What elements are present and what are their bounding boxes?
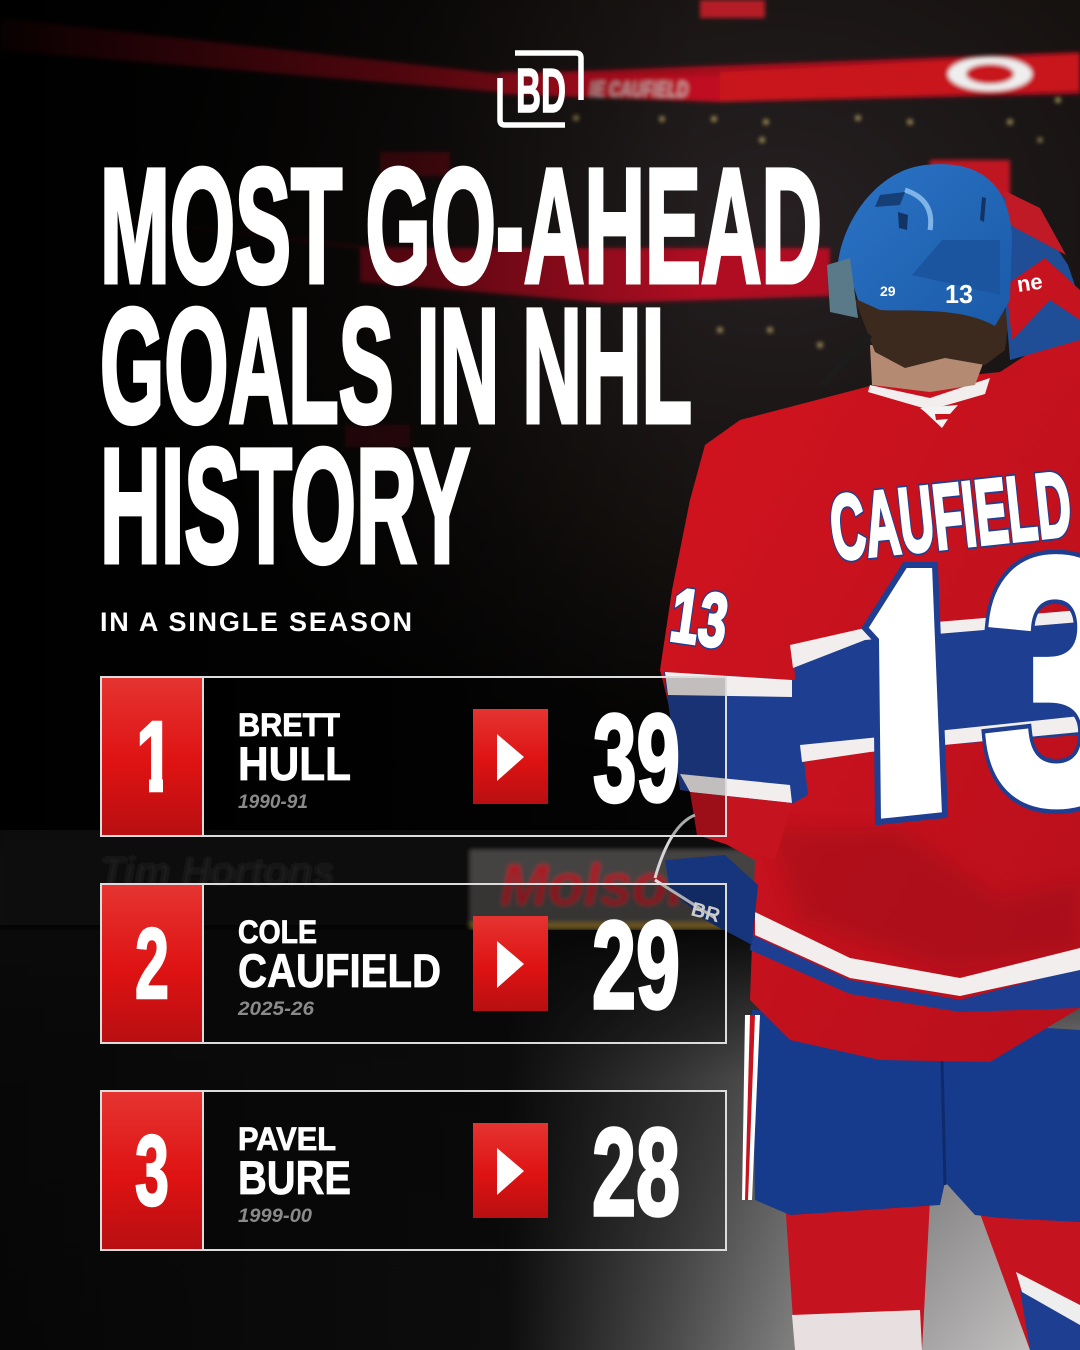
player name — [238, 1121, 351, 1204]
value: 39 — [593, 690, 680, 828]
logo: BD — [500, 53, 581, 126]
rank badge 2 — [102, 885, 202, 1042]
player name: BRETT — [238, 707, 340, 743]
right glove raised — [1000, 190, 1080, 360]
glove — [655, 815, 758, 945]
ice — [0, 930, 1080, 1350]
ribbon board: upper: IE CAUFIELD — [590, 77, 688, 102]
title — [100, 134, 822, 597]
panel: rank 2 — [101, 884, 726, 1043]
sleeve number — [666, 573, 733, 665]
panel: rank 3 — [101, 1091, 726, 1250]
rank badge 2: 2 — [135, 908, 169, 1020]
helmet: 29 — [880, 283, 896, 299]
jersey number 13 — [865, 486, 1080, 877]
collar and logo — [868, 378, 990, 428]
glove: BR — [689, 899, 723, 927]
player name: HULL — [238, 737, 351, 790]
logo: BD: BD — [516, 57, 566, 126]
jersey hem stripes — [750, 912, 1080, 1012]
value: 29 — [592, 897, 680, 1035]
player name: COLE — [238, 914, 317, 950]
rank badge 1 — [102, 678, 202, 835]
chest blue band — [790, 610, 1080, 762]
hockey pants — [752, 1010, 1080, 1222]
value: 28 — [592, 1104, 680, 1242]
ribbon board: upper — [0, 0, 1080, 102]
player name — [238, 707, 351, 790]
player name: CAUFIELD — [238, 944, 441, 997]
neck and hair — [855, 300, 1010, 392]
player name: PAVEL — [238, 1121, 336, 1157]
jersey torso — [660, 320, 1080, 1062]
sleeve — [664, 672, 808, 860]
boards: Molson — [500, 853, 703, 918]
helmet — [822, 164, 1012, 385]
arrow icon — [473, 709, 548, 804]
left darkening — [0, 0, 700, 850]
socks — [785, 1200, 1080, 1350]
rank badge 1: 1 — [136, 701, 174, 813]
ribbon board: middle — [0, 152, 1010, 447]
jersey shading — [770, 830, 1080, 970]
player: Caufield — [655, 164, 1080, 1350]
helmet: 13 — [945, 279, 973, 309]
boards — [0, 830, 770, 930]
player name: BURE — [238, 1151, 351, 1204]
boards: Tim Hortons — [100, 850, 335, 894]
arrow icon — [473, 916, 548, 1011]
season: 1999-00 — [238, 1206, 312, 1227]
sleeve number: 13 — [666, 573, 733, 665]
arrow icon — [473, 1123, 548, 1218]
rank badge 3: 3 — [135, 1115, 169, 1227]
rank badge 3 — [102, 1092, 202, 1249]
sleeve number: 13 — [666, 573, 733, 665]
season: 1990-91 — [238, 792, 308, 813]
title: HISTORY — [100, 414, 470, 597]
arena lights — [573, 97, 1061, 348]
right glove raised: ne — [1015, 269, 1044, 297]
subtitle: IN A SINGLE SEASON — [100, 607, 412, 637]
season: 2025-26 — [237, 999, 314, 1020]
player name — [238, 914, 441, 997]
panel: rank 1 — [101, 677, 726, 836]
